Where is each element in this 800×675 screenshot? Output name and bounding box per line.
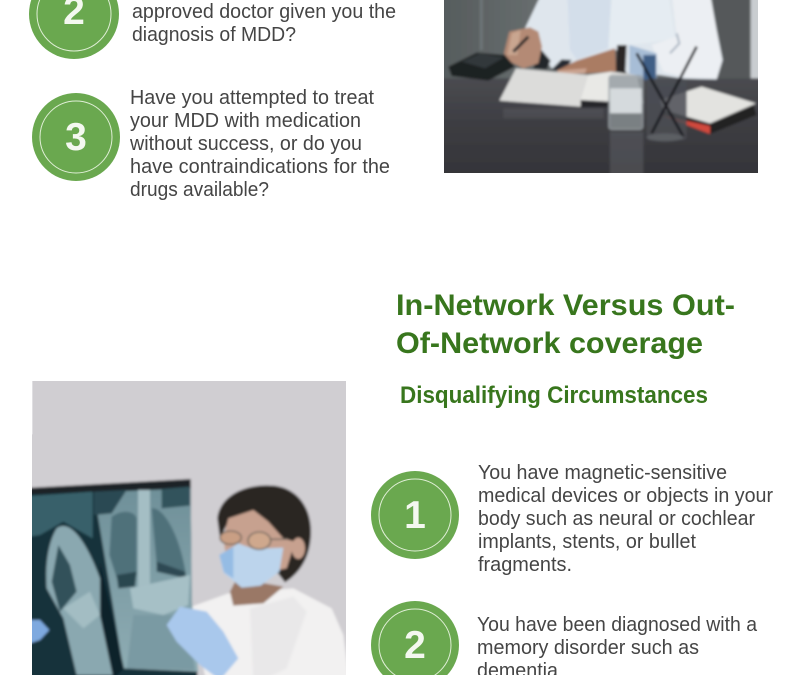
heading: network coverage: In-Network Versus Out-	[396, 289, 735, 322]
photo: doctor writing at desk	[437, 0, 767, 178]
glasses	[220, 531, 241, 544]
forehead hair fringe	[225, 492, 300, 538]
item 1 text: body such as neural or cochlear	[478, 507, 755, 530]
subheading: disqualifying circumstances: Disqualifying Circumstances	[400, 382, 708, 409]
step 2 text: diagnosis of MDD?	[132, 23, 296, 46]
item 2 text	[477, 613, 758, 675]
step 3 text: without success, or do you	[129, 132, 362, 155]
item 1 text: implants, stents, or bullet	[478, 530, 696, 553]
neck	[230, 578, 283, 606]
pen holder	[647, 78, 687, 140]
calculator	[448, 53, 515, 81]
step 2 text: approved doctor given you the	[132, 0, 396, 23]
red book	[686, 106, 756, 134]
step 3 text: Have you attempted to treat	[130, 86, 374, 109]
step 2 badge	[29, 0, 119, 59]
photo: doctor examining x-ray	[20, 375, 357, 675]
step 3 badge: 3	[65, 116, 87, 159]
x-ray film	[20, 481, 198, 675]
mask	[219, 543, 283, 588]
item 2 badge	[371, 601, 459, 675]
item 1 badge	[371, 471, 459, 559]
item 1 text: fragments.	[478, 553, 572, 576]
item 1 text: medical devices or objects in your	[478, 484, 773, 507]
glass	[608, 75, 643, 130]
item 1 badge: 1	[404, 494, 426, 537]
step 3 text: your MDD with medication	[130, 109, 361, 132]
gloves	[167, 607, 238, 675]
step 3 badge	[32, 93, 120, 181]
notebook	[499, 68, 643, 107]
lungs	[109, 512, 137, 588]
item 2 badge: 2	[404, 624, 426, 667]
hair	[217, 485, 311, 582]
cuffs	[533, 48, 551, 69]
step 2 text	[132, 0, 396, 46]
shirt	[525, 0, 723, 79]
item 2 text: memory disorder such as	[477, 636, 699, 659]
ear	[292, 538, 305, 559]
side lung	[46, 526, 113, 675]
item 1 text: You have magnetic-sensitive	[478, 461, 727, 484]
item 1 text	[478, 461, 773, 576]
hands	[504, 27, 542, 68]
heading: network coverage: Of-Network coverage	[396, 327, 703, 360]
coat	[192, 588, 350, 675]
item 2 text: You have been diagnosed with a	[477, 613, 758, 636]
face	[223, 510, 295, 575]
heading: network coverage	[396, 289, 735, 360]
step 3 text: drugs available?	[130, 178, 269, 201]
step 3 text: have contraindications for the	[130, 155, 390, 178]
step 3 text	[129, 86, 390, 201]
